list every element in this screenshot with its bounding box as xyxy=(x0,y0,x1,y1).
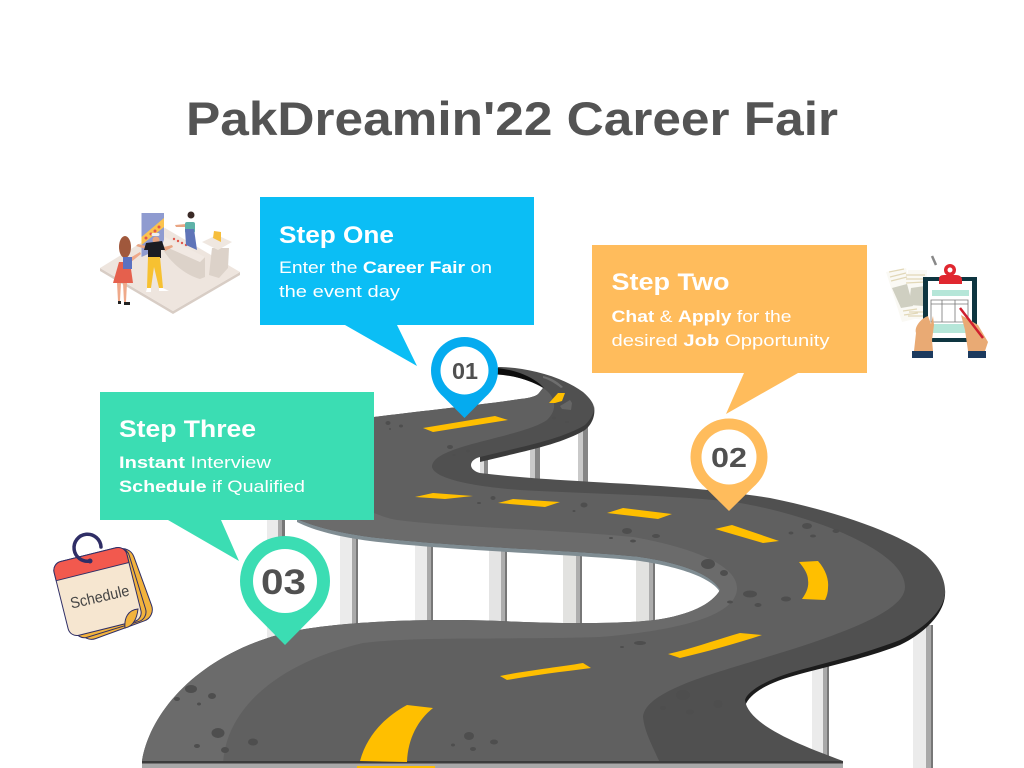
map pin 03 xyxy=(240,536,330,645)
map pin 01: 01 xyxy=(452,358,478,384)
step one description: the event day xyxy=(279,282,401,301)
step two description: desired Job Opportunity xyxy=(612,331,830,350)
step two description xyxy=(612,307,830,350)
yellow lane dashes xyxy=(357,393,828,768)
left hand xyxy=(914,316,934,351)
step two description: Chat & Apply for the xyxy=(612,307,792,326)
step three description xyxy=(119,453,305,496)
panel: step three xyxy=(100,392,374,561)
panel: step one xyxy=(260,197,534,366)
road shading xyxy=(120,376,905,768)
title: PakDreamin'22 Career Fair xyxy=(186,92,838,145)
staff figure xyxy=(175,212,197,250)
woman figure xyxy=(113,236,141,305)
road base line xyxy=(142,761,843,768)
man figure xyxy=(136,233,173,292)
map pin 01 xyxy=(431,337,498,418)
map pin 02 xyxy=(690,418,768,511)
curled page corner xyxy=(125,609,138,628)
map pin 03: 03 xyxy=(261,563,306,602)
step one description: Enter the Career Fair on xyxy=(279,258,492,277)
step three description: Schedule if Qualified xyxy=(119,477,305,496)
map pin 02: 02 xyxy=(711,442,747,473)
icon: schedule calendar xyxy=(52,534,156,643)
step two heading: Step Two xyxy=(612,269,730,296)
step three description: Instant Interview xyxy=(119,453,272,472)
calendar ring xyxy=(74,534,101,561)
icon: career fair booth xyxy=(100,212,240,314)
calendar label: Schedule xyxy=(69,582,131,613)
road illustration xyxy=(120,367,945,768)
step one speech bubble xyxy=(260,197,534,366)
step one description xyxy=(279,258,492,301)
support posts xyxy=(267,418,933,768)
black inner edge of top bend xyxy=(497,368,544,388)
right hand xyxy=(961,315,988,351)
paper sheets xyxy=(886,256,936,322)
road under-edge shadow xyxy=(297,406,945,706)
panel: step two xyxy=(592,245,867,414)
icon: clipboard with hands xyxy=(886,256,988,358)
road surface xyxy=(142,367,945,761)
step three speech bubble xyxy=(100,392,374,561)
pen xyxy=(960,308,983,338)
step two speech bubble xyxy=(592,245,867,414)
step three heading: Step Three xyxy=(119,416,256,443)
infographic canvas xyxy=(53,100,988,768)
road surface specks xyxy=(174,416,840,753)
step one heading: Step One xyxy=(279,222,394,249)
